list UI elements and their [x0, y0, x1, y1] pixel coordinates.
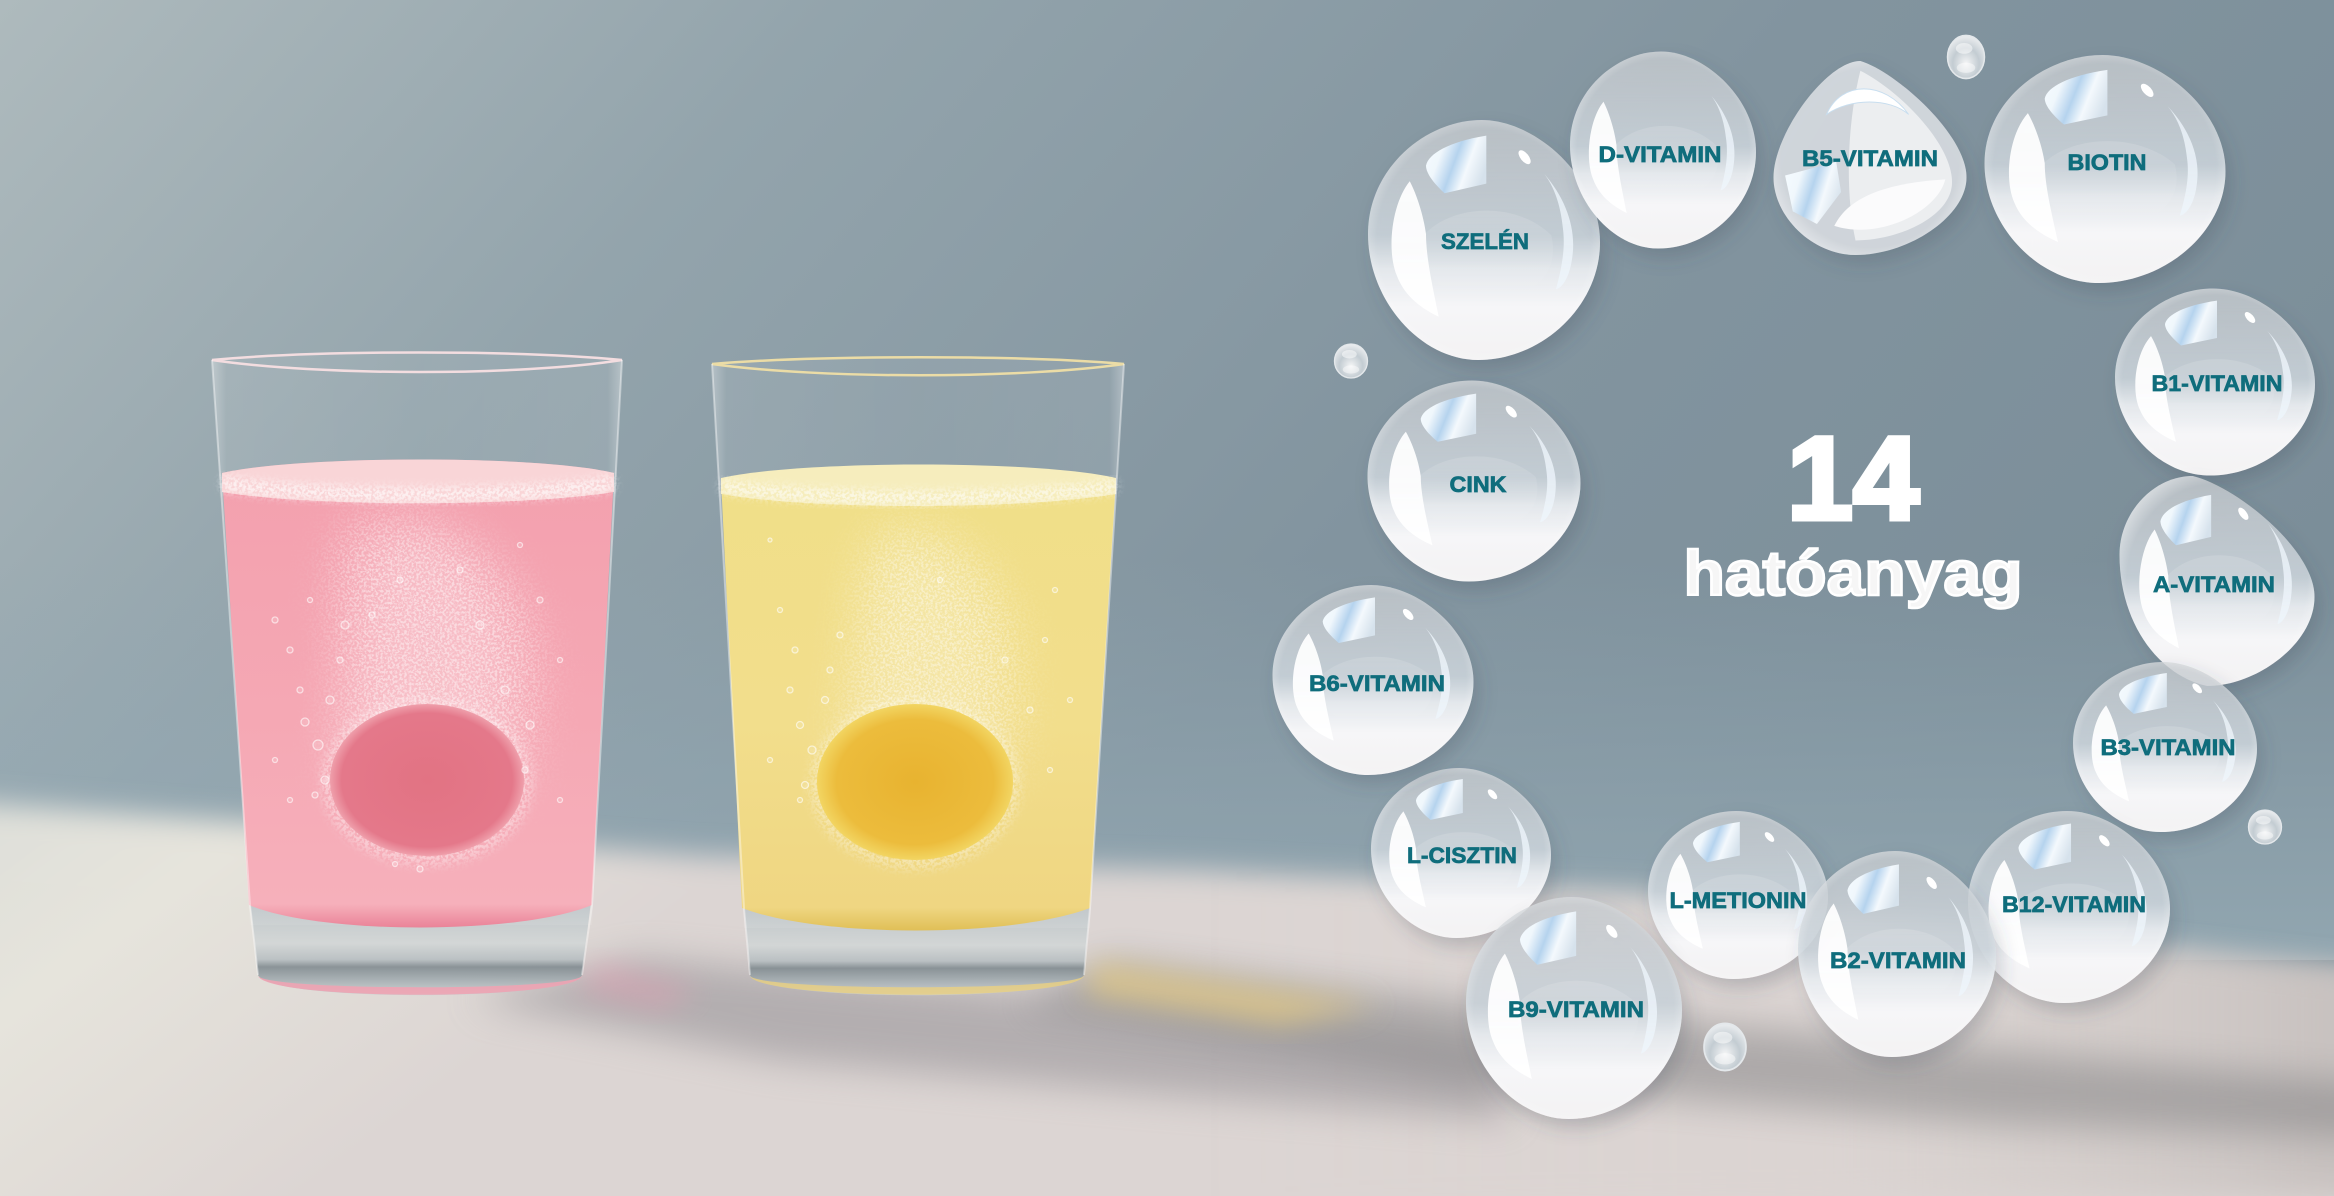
bubble: A-VITAMIN: A-VITAMIN: [2153, 572, 2275, 597]
yellow tablet halo: [809, 698, 1021, 870]
bubble: SZELÉN: [1368, 120, 1600, 360]
pink foam band: [222, 476, 614, 501]
yellow foam band: [721, 480, 1116, 504]
bubble: L-CISZTIN: [1371, 768, 1551, 938]
yellow glass: [712, 357, 1124, 995]
yellow fizz glow: [850, 532, 997, 770]
yellow liquid: [721, 465, 1116, 930]
bubble: B6-VITAMIN: [1272, 585, 1474, 775]
headline number: 14: [1787, 413, 1919, 545]
bubble: B9-VITAMIN: B9-VITAMIN: [1508, 997, 1644, 1022]
pink glass bottom tint: [258, 976, 582, 995]
yellow glass upper wall: [712, 358, 1124, 928]
bubble: BIOTIN: BIOTIN: [2068, 150, 2146, 175]
bubble: L-METIONIN: [1648, 811, 1828, 979]
yellow rising bubbles: [768, 538, 1072, 802]
bubble: BIOTIN: [1984, 55, 2226, 283]
bubble: B5-VITAMIN: [1774, 61, 1966, 255]
small droplets: [1334, 36, 2282, 1070]
yellow tablet: [817, 704, 1013, 860]
bubble: L-METIONIN: L-METIONIN: [1670, 888, 1806, 913]
bubble: B2-VITAMIN: B2-VITAMIN: [1830, 948, 1966, 973]
bubble: B12-VITAMIN: [1968, 811, 2170, 1003]
pink glass: [212, 352, 622, 995]
bubble: B6-VITAMIN: B6-VITAMIN: [1309, 671, 1445, 696]
bubble: B9-VITAMIN: [1466, 897, 1682, 1119]
yellow liquid surface: [721, 464, 1116, 506]
bubble: B3-VITAMIN: [2073, 662, 2257, 832]
bubble: L-CISZTIN: L-CISZTIN: [1407, 843, 1517, 868]
pink tablet halo: [321, 698, 533, 866]
yellow glass walls: [712, 364, 1124, 975]
bubble: B1-VITAMIN: B1-VITAMIN: [2152, 371, 2282, 396]
glass shadows on the table: [470, 958, 2334, 1140]
bubble: B3-VITAMIN: B3-VITAMIN: [2100, 735, 2236, 760]
bubble: B2-VITAMIN: [1798, 851, 1996, 1057]
bubble: A-VITAMIN: [2120, 476, 2314, 686]
bubble: B1-VITAMIN: [2115, 288, 2315, 476]
pink fizz plume: [332, 516, 541, 790]
bubble: B12-VITAMIN: B12-VITAMIN: [2002, 892, 2146, 917]
pink tablet: [330, 704, 524, 856]
bubble: CINK: [1368, 380, 1580, 582]
bubble: D-VITAMIN: D-VITAMIN: [1598, 142, 1722, 167]
pink glass base: [250, 901, 591, 995]
bubble: D-VITAMIN: [1570, 52, 1756, 248]
pink glass walls: [212, 360, 622, 975]
yellow fizz plume: [840, 529, 1022, 790]
pink rising bubbles: [272, 542, 562, 872]
yellow glass bottom tint: [750, 976, 1084, 995]
yellow glass base: [744, 905, 1090, 995]
bubble: SZELÉN: SZELÉN: [1441, 229, 1529, 254]
yellow glass rim: [712, 357, 1124, 375]
pink glass rim: [212, 352, 622, 372]
pink liquid: [222, 460, 614, 928]
pink liquid surface: [222, 460, 614, 503]
headline label: hatóanyag: [1684, 539, 2022, 609]
pink fizz glow: [345, 526, 514, 770]
pink glass upper wall: [212, 352, 622, 925]
bubble: B5-VITAMIN: B5-VITAMIN: [1802, 146, 1938, 171]
bubble: CINK: CINK: [1450, 472, 1507, 497]
